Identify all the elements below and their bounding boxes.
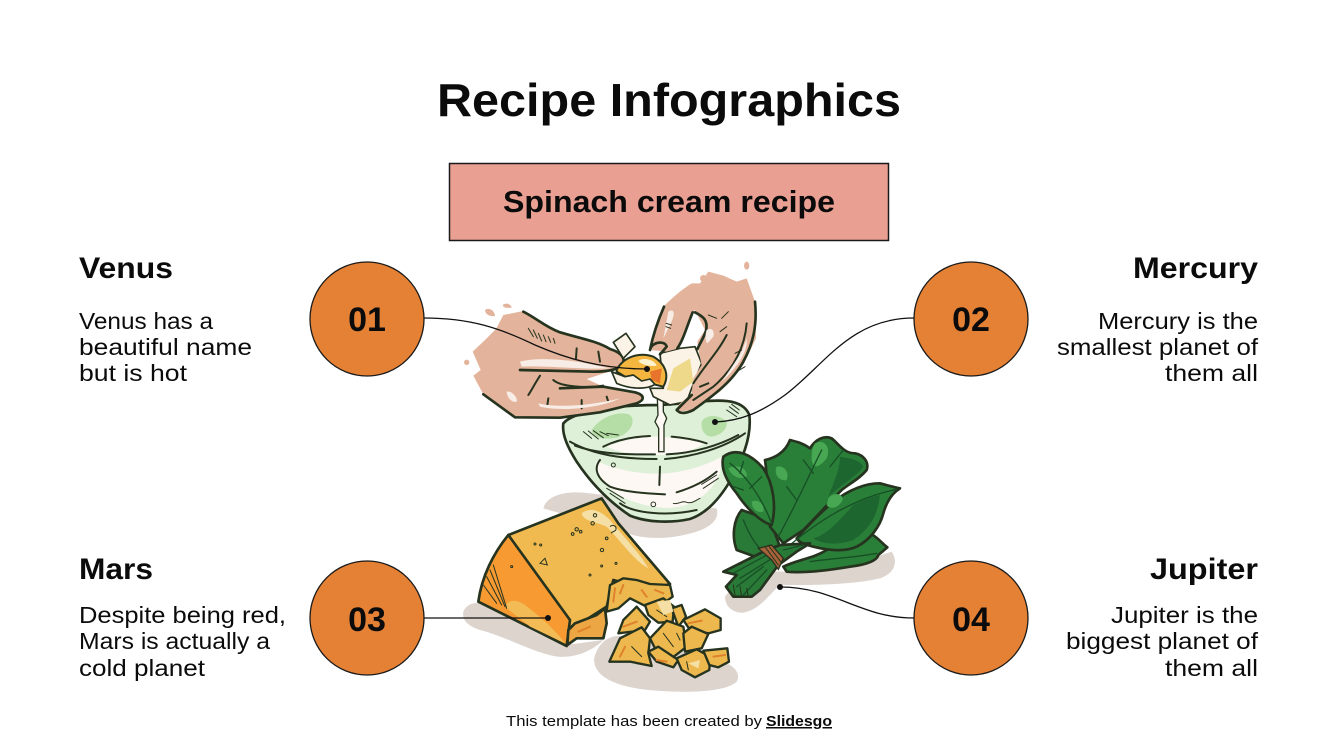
text block: Jupiter: Jupiter is the — [1111, 602, 1258, 628]
footer credit: Slidesgo — [766, 713, 832, 730]
title: Recipe Infographics — [437, 74, 901, 126]
connector: 03 to cheese — [424, 615, 551, 621]
step badge 04: 04 — [952, 601, 990, 639]
text block: Mercury: them all — [1165, 360, 1258, 386]
illustration: left hand holding egg shell — [464, 304, 643, 418]
text block: Jupiter — [1066, 553, 1259, 681]
text block: Venus: but is hot — [79, 360, 188, 386]
text block: Jupiter: biggest planet of — [1066, 628, 1259, 654]
illustration: shadows — [463, 492, 895, 692]
step badge 03 — [310, 561, 424, 675]
text block: Venus: Venus — [79, 252, 173, 285]
illustration: right hand holding egg shell — [650, 262, 756, 413]
step badge 01: 01 — [348, 301, 386, 339]
illustration: spinach bunch — [723, 437, 900, 597]
illustration: cracked egg with yolk — [612, 333, 702, 405]
illustration: wedge of cheese — [478, 498, 670, 646]
text block: Mars — [79, 553, 286, 681]
step badge 03: 03 — [348, 601, 386, 639]
text block: Mars: Despite being red, — [79, 602, 286, 628]
text block: Mars: Mars — [79, 553, 153, 586]
text block: Venus — [79, 252, 252, 386]
text block: Mars: Mars is actually a — [79, 628, 270, 654]
footer credit: This template has been created by — [506, 713, 763, 730]
step badge 02 — [914, 262, 1028, 376]
text block: Mercury: smallest planet of — [1057, 334, 1259, 360]
text block: Mercury — [1057, 252, 1259, 386]
connector: 01 to egg yolk — [424, 318, 650, 372]
illustration: glass bowl with egg white — [563, 398, 750, 522]
text block: Mars: cold planet — [79, 655, 206, 681]
text block: Venus: beautiful name — [79, 334, 252, 360]
text block: Mercury: Mercury — [1133, 252, 1258, 285]
connector: 04 to spinach — [777, 584, 914, 618]
text block: Jupiter: Jupiter — [1150, 553, 1258, 586]
text block: Mercury: Mercury is the — [1098, 308, 1258, 334]
subtitle banner: Spinach cream recipe — [503, 184, 835, 219]
step badge 04 — [914, 561, 1028, 675]
text block: Venus: Venus has a — [79, 308, 213, 334]
subtitle banner — [450, 164, 888, 240]
connector: 02 to bowl — [712, 318, 914, 425]
illustration: recipe ingredients — [463, 262, 900, 692]
text block: Jupiter: them all — [1165, 655, 1258, 681]
step badge 01 — [310, 262, 424, 376]
illustration: cheese crumbs — [578, 578, 729, 677]
step badge 02: 02 — [952, 301, 990, 339]
